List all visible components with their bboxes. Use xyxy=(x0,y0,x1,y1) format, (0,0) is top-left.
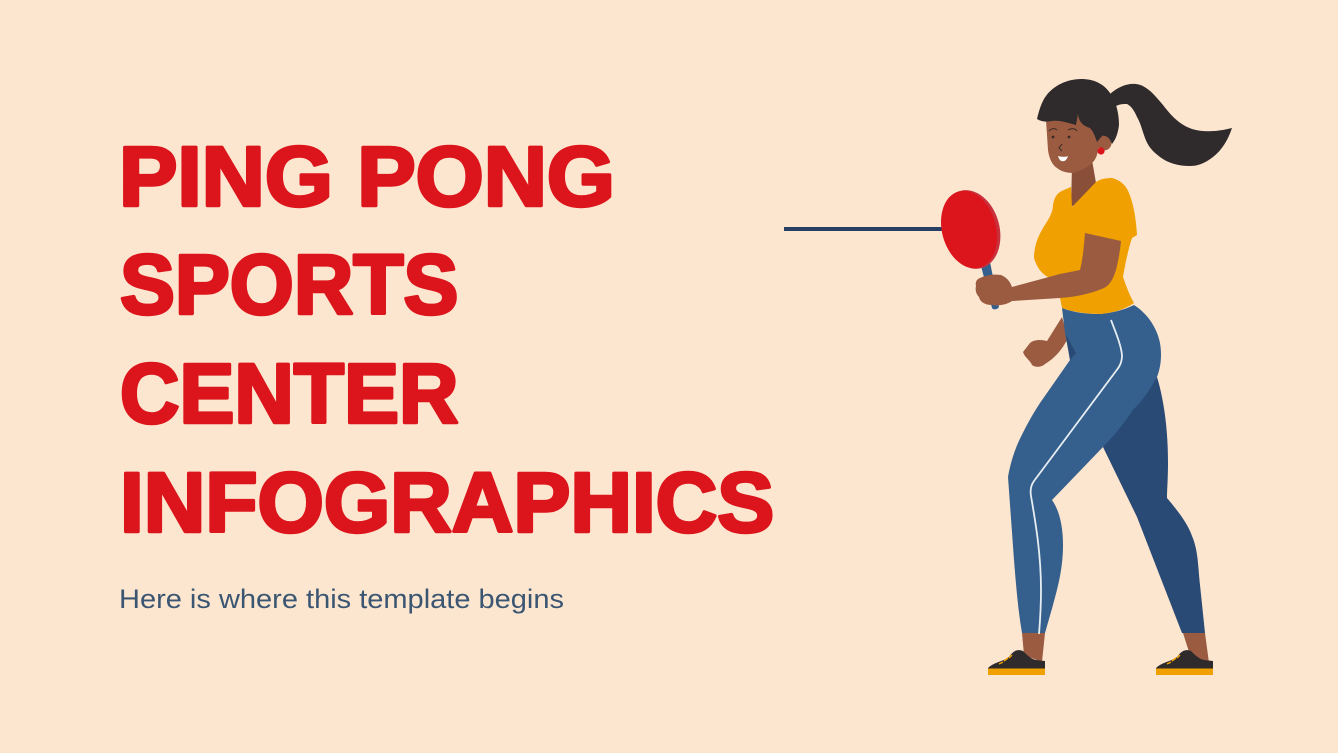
paddle handle xyxy=(981,262,999,309)
smile xyxy=(1058,156,1068,161)
shirt xyxy=(1034,178,1137,314)
neck xyxy=(1071,160,1096,207)
front arm and hand xyxy=(976,233,1121,305)
trouser stripe xyxy=(1031,320,1122,634)
title xyxy=(119,130,774,549)
ear xyxy=(1096,136,1112,150)
subtitle: Here is where this template begins xyxy=(119,584,564,614)
front leg trousers xyxy=(1008,305,1161,633)
title: PING PONG xyxy=(119,130,615,224)
eyes, brows and nose xyxy=(1049,129,1077,151)
title: INFOGRAPHICS xyxy=(120,455,774,549)
dark fold at hip xyxy=(1066,335,1076,360)
title: CENTER xyxy=(120,347,458,441)
illustration: woman playing ping pong xyxy=(933,79,1232,675)
face xyxy=(1046,110,1102,173)
paddle xyxy=(933,183,1009,276)
ponytail xyxy=(1110,84,1232,166)
earring xyxy=(1097,147,1105,155)
front shoe xyxy=(988,650,1045,675)
title: SPORTS xyxy=(120,238,458,332)
horizontal line from paddle xyxy=(784,227,944,231)
front leg calf xyxy=(1022,633,1045,662)
back leg calf xyxy=(1183,633,1209,663)
back shoe xyxy=(1156,650,1213,675)
back leg xyxy=(1103,377,1205,634)
back arm and fist xyxy=(1023,317,1068,367)
hair xyxy=(1037,79,1119,144)
